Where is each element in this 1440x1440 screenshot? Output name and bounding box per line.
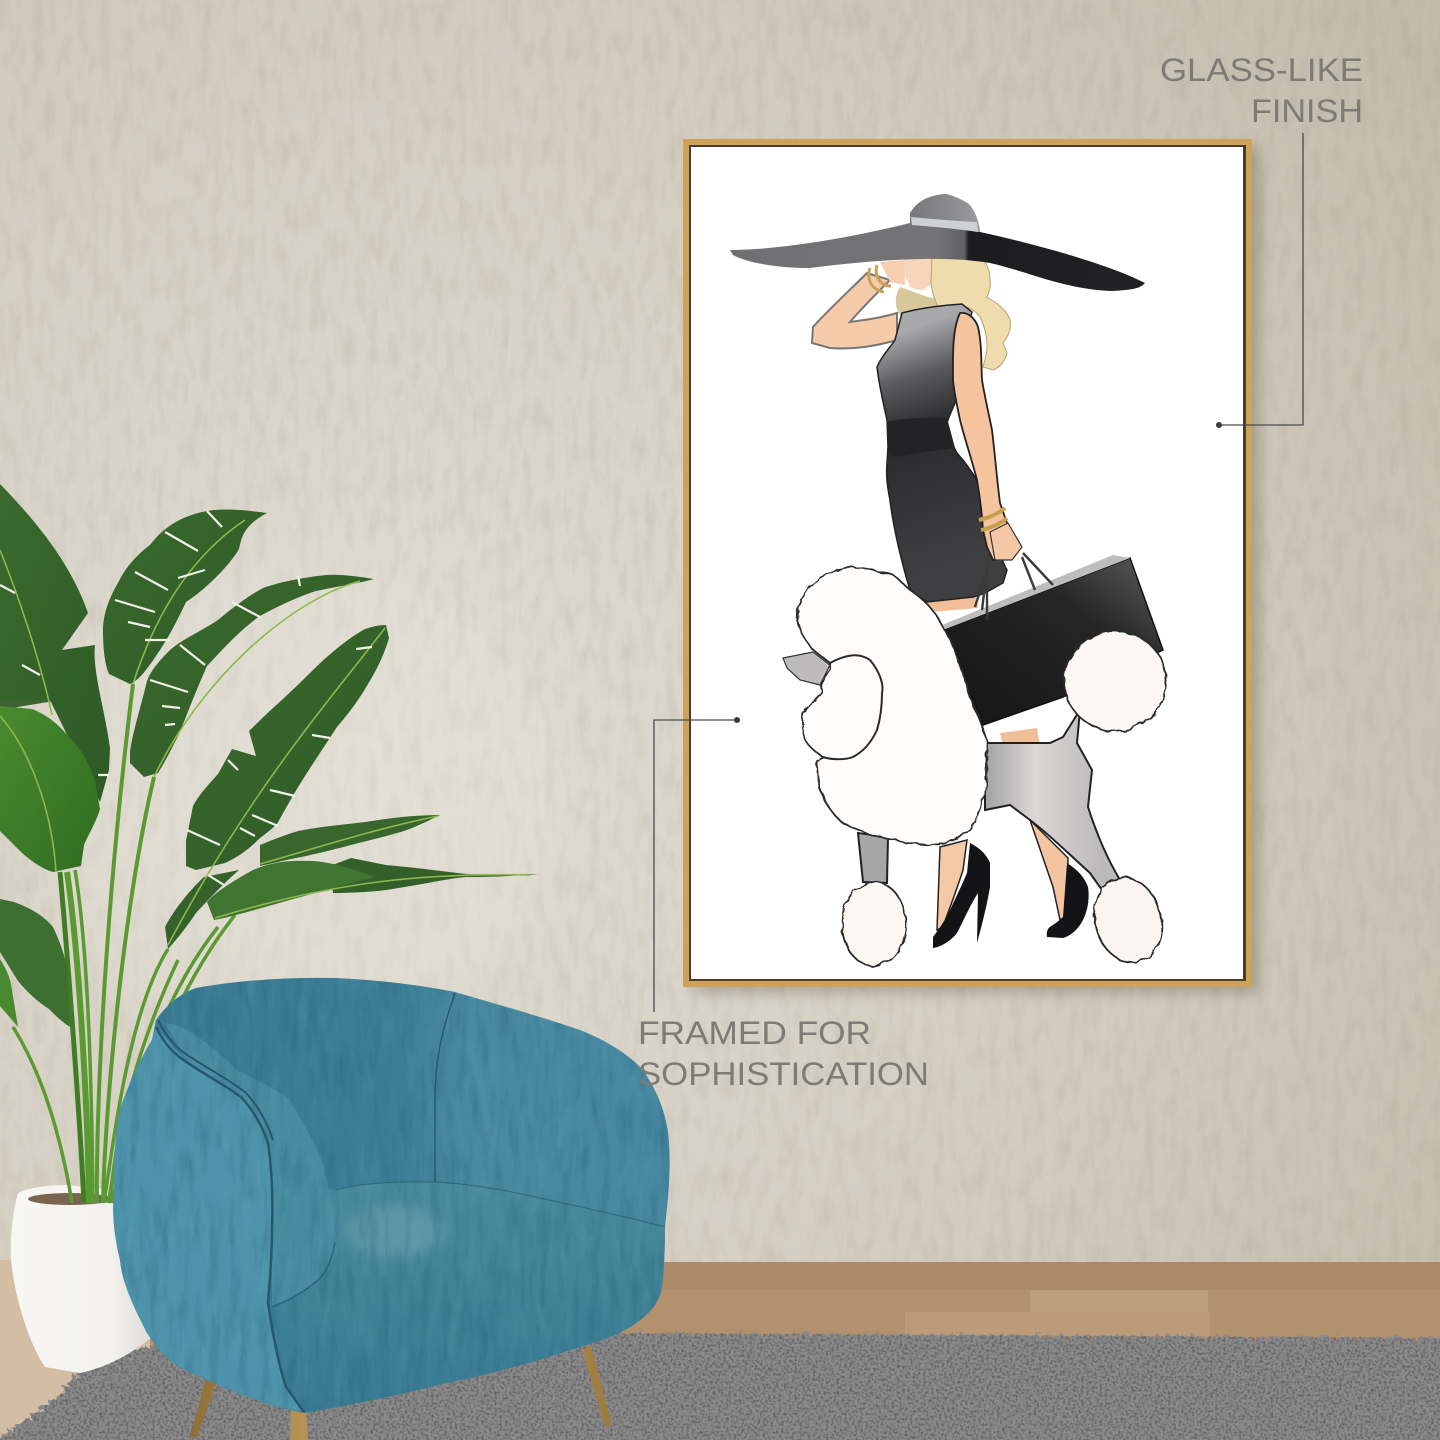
wall glow behind the plant [40, 560, 560, 1040]
wooden floor [0, 1260, 1440, 1440]
chair legs [190, 1345, 612, 1440]
poodle ear crease [823, 655, 882, 759]
poodle fluff [798, 568, 1171, 970]
hair [931, 257, 1010, 370]
leaf: right horizontal [260, 815, 440, 866]
poodle body and legs [858, 710, 1120, 897]
hat crown [910, 194, 980, 232]
chair shell [113, 978, 670, 1413]
leaf: large left [0, 706, 100, 872]
bag top edge [942, 555, 1130, 630]
bangles on raised arm [869, 265, 891, 292]
poodle rear foot pom [1085, 870, 1171, 970]
far leg [1030, 820, 1068, 920]
leaf: small left edge [0, 959, 18, 1027]
frame shadow [695, 150, 1260, 993]
far shoe [1047, 863, 1089, 938]
hat band [911, 217, 978, 232]
skin below skirt [922, 590, 978, 612]
leaf: upper left [0, 484, 110, 802]
chin hair [896, 287, 945, 316]
leader line [654, 720, 737, 1012]
callout text: FRAMED FOR [638, 1015, 871, 1051]
illustration: woman with poodle [730, 194, 1171, 970]
belt [888, 418, 955, 457]
face [903, 258, 937, 290]
chair piping and seams [156, 993, 665, 1412]
gold frame [683, 139, 1252, 987]
leaf: diagonal right [186, 625, 389, 870]
leaf: low pointed [207, 861, 375, 920]
far arm [953, 313, 1020, 560]
callout: glass-like finish [1160, 52, 1363, 428]
poodle front foot pom [842, 882, 906, 966]
leaf: top centre [103, 510, 267, 684]
leaf: back left [0, 620, 60, 710]
hand holding bag [990, 523, 1022, 560]
soil [28, 1193, 112, 1205]
hat [730, 223, 1145, 291]
callout: framed for sophistication [638, 717, 929, 1092]
leaf midribs [0, 520, 530, 945]
leaf: long upper [130, 575, 374, 777]
chair seat [272, 1182, 665, 1413]
plant pot [11, 1185, 152, 1373]
plant stems [13, 684, 235, 1203]
callout: framed for sophistication: SOPHISTICATION [638, 1056, 929, 1092]
leaf: long pointed right [330, 858, 539, 893]
inner arm [165, 1023, 335, 1307]
grey shag rug [0, 1330, 1440, 1440]
leader line [1219, 133, 1303, 425]
near leg [937, 840, 967, 930]
leaf: lower centre [165, 870, 239, 949]
hand [880, 260, 905, 285]
plant leaves [0, 484, 539, 1027]
seat highlight [345, 1206, 445, 1258]
outer arm [113, 1027, 304, 1412]
callout: glass-like finish: FINISH [1251, 93, 1363, 129]
skin below bag [1000, 728, 1040, 746]
poodle snout [783, 652, 830, 685]
raised arm [812, 273, 897, 348]
armchair [100, 970, 680, 1440]
shopping bag [943, 558, 1163, 725]
white canvas [691, 147, 1243, 979]
black dress [877, 304, 1007, 602]
bangles [979, 508, 1007, 530]
velvet texture [100, 970, 680, 1420]
callout text: GLASS-LIKE [1160, 52, 1363, 88]
white leaf streaks [0, 511, 372, 885]
panel: framed artwork [683, 139, 1252, 987]
poodle tail pom [1064, 631, 1166, 731]
near shoe [933, 843, 990, 948]
bag handles [975, 553, 1053, 620]
leaf: lower left [0, 899, 70, 1027]
